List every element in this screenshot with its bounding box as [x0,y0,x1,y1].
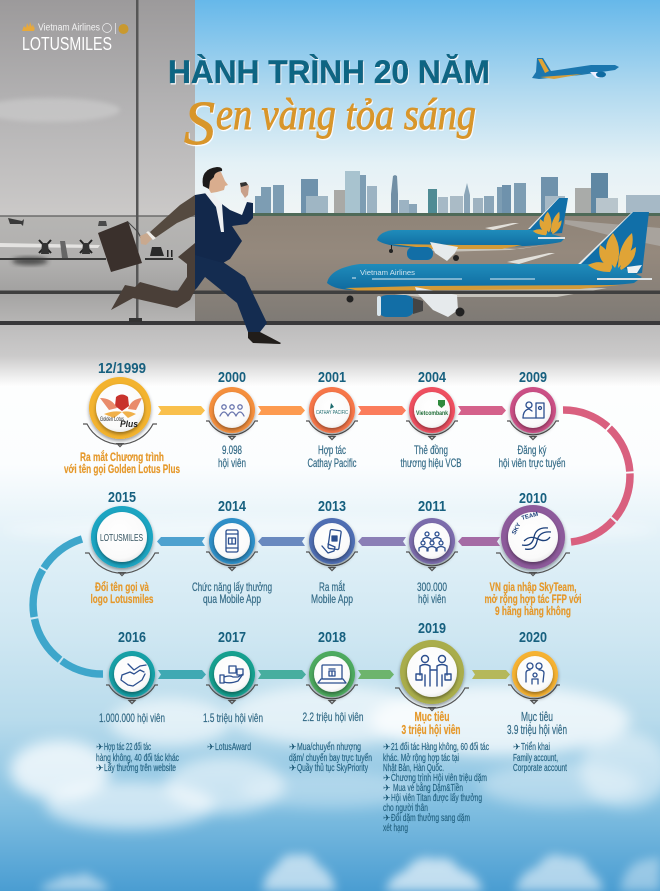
node: 2019: cho người thân [383,802,428,814]
node: 2019 [383,621,489,834]
node: 2019: Mục tiêu [414,710,450,724]
node: 2018: Mua/chuyển nhượng [297,741,361,753]
node: 2010 SkyTeam: 9 hãng hàng không [495,604,571,618]
node: 2010 SkyTeam: VN gia nhập SkyTeam, [490,580,576,594]
node: 2019: ✈ [383,794,391,804]
node: 2010 SkyTeam: SKY [511,522,523,536]
node: 2014: Chức năng lấy thưởng [192,580,272,594]
node: 12/1999 Golden Lotus Plus: Golden Lotus [100,417,124,423]
node: 2018: 2018 [318,630,346,646]
node: 2010 SkyTeam [484,491,582,618]
front leg [195,255,267,332]
timeline connector: pink curve 2009 to 2010 [563,410,630,542]
parked plane (rear) [377,198,568,261]
node: 2020: Corporate account [513,762,567,774]
node: 2014: qua Mobile App [203,592,261,606]
node: 2009 [498,370,566,470]
running businessman [98,167,281,344]
node: 2010 SkyTeam: mở rộng hợp tác FFP với [484,592,582,606]
node: 2017: 1.5 triệu hội viên [203,711,263,725]
node: 2017: LotusAward [215,741,251,753]
node: 2018: 2.2 triệu hội viên [302,710,364,724]
node: 2019: Nhật Bản, Hàn Quốc. [383,762,444,774]
row 1 arrows [158,406,506,415]
node: 2009: Đăng ký [518,443,546,457]
hero scene: airport window [0,0,660,322]
node: 2015 Lotusmiles: 2015 [108,490,136,506]
node: 2014 [192,499,272,606]
node: 2015 Lotusmiles: LOTUSMILES [100,533,143,544]
node: 2016: 1.000.000 hội viên [99,711,165,725]
node: 2001: CATHAY PACIFIC [316,410,348,416]
node: 2019: Mua vé bằng Dặm&Tiền [393,781,463,794]
node: 2013 [306,499,358,606]
node: 2020: 3.9 triệu hội viên [507,723,567,737]
row 3 arrows [158,670,510,679]
node: 2019: xét hạng [383,822,408,834]
node: 12/1999 Golden Lotus Plus: 12/1999 [98,361,146,377]
node: 12/1999 Golden Lotus Plus: với tên gọi Golden Lotus Plus [64,462,180,476]
node: 2019: khác. Mở rộng hợp tác tại [383,752,459,764]
node: 12/1999 Golden Lotus Plus: Plus [120,419,138,429]
node: 2019: ✈ [383,814,391,824]
grey panel [0,0,195,216]
logo: Vietnam Airlines Lotusmiles [22,22,128,54]
node: 2004: Thẻ đồng [414,443,448,457]
node: 2017: 2017 [218,630,246,646]
node: 2000: 9.098 [222,443,242,457]
node: 2004 [400,370,462,470]
node: 2020: ✈ [513,743,521,753]
node: 2019: ✈ [383,774,391,784]
node: 2019: Hội viên Titan được lấy thưởng [391,792,482,804]
node: 2016: Lấy thưởng trên website [104,762,176,774]
node: 2020 [507,630,567,774]
city skyline [255,171,660,216]
shirt [205,191,224,232]
subtitle: S [184,90,215,158]
node: 2019: ✈ [383,743,391,753]
node: 2016: 2016 [118,630,146,646]
node: 2011 [406,499,458,606]
logo: Vietnam Airlines Lotusmiles: LOTUSMILES [22,34,112,54]
parked plane (front) [327,212,652,317]
node: 2011: 2011 [418,499,446,515]
node: 2019: ✈ [383,784,391,794]
flying plane [532,58,619,79]
node: 2018: dặm/ chuyến bay trực tuyến [289,752,372,764]
node: 2013: 2013 [318,499,346,515]
node: 2015 Lotusmiles: logo Lotusmiles [90,592,154,606]
node: 2016: hàng không, 40 đối tác khác [96,752,179,764]
briefcase [98,221,142,272]
rear arm (sepia) [150,195,195,238]
node: 2019: Chương trình Hội viên triệu dặm [391,772,487,784]
node: 2016: ✈ [96,764,104,774]
node: 12/1999 Golden Lotus Plus [64,361,180,476]
head [206,170,228,193]
logo: Vietnam Airlines Lotusmiles: Vietnam Airlines [38,22,100,34]
node: 2019: 2019 [418,621,446,637]
node: 2018 [289,630,372,774]
node: 2017 [203,630,263,753]
node: 2016 [96,630,179,774]
torso [195,193,253,263]
node: 2018: Quầy thủ tục SkyPriority [297,762,368,774]
node: 2009: hội viên trực tuyến [498,456,566,470]
node: 2014: 2014 [218,499,246,515]
subtitle: en vàng tỏa sáng [216,90,476,139]
node: 2000 [206,370,258,470]
node: 2020: Triển khai [521,741,550,753]
subtitle [184,90,476,158]
tarmac [195,216,660,322]
node: 2013: Mobile App [311,592,353,606]
node: 2016: ✈ [96,743,104,753]
window frame [0,0,660,387]
page background with clouds [0,322,660,891]
node: 2010 SkyTeam: TEAM [521,512,539,522]
fist [240,182,249,198]
row 2 arrows [157,537,500,546]
node: 2020: Family account, [513,752,558,764]
node: 2018: ✈ [289,764,297,774]
node: 2001: 2001 [318,370,346,386]
node: 12/1999 Golden Lotus Plus: Ra mắt Chương trình [80,449,164,464]
node: 2019: 3 triệu hội viên [402,723,460,737]
node: 2004: 2004 [418,370,446,386]
node: 2015 Lotusmiles [85,490,159,606]
node: 2019: 21 đối tác Hàng không, 60 đối tác [391,741,489,753]
node: 2001 [306,370,358,470]
parked plane (front): Vietnam Airlines [360,268,415,277]
node: 2015 Lotusmiles: Đổi tên gọi và [95,580,149,594]
node: 2010 SkyTeam: 2010 [519,491,547,507]
node: 2013: Ra mắt [319,579,345,594]
rear leg and coat tail (sepia) [111,243,195,310]
sky [195,0,660,218]
node: 2019: Đổi dặm thưởng sang dặm [391,812,470,824]
node: 2018: ✈ [289,743,297,753]
node: 2001: Cathay Pacific [308,456,356,470]
node: 2000: 2000 [218,370,246,386]
title: HÀNH TRÌNH 20 NĂM [168,54,490,90]
node: 2009: 2009 [519,370,547,386]
node: 2011: hội viên [418,592,446,606]
node: 2020: 2020 [519,630,547,646]
node: 2004: Vietcombank [416,410,448,417]
node: 2000: hội viên [218,456,246,470]
node: 2011: 300.000 [417,580,447,594]
old propeller planes [0,218,173,265]
node: 2001: Hợp tác [318,443,346,457]
node: 2004: thương hiệu VCB [400,456,462,470]
timeline connector: blue curve 2015 to 2016 [33,539,103,674]
node: 2017: ✈ [207,743,215,753]
node: 2020: Mục tiêu [521,710,553,724]
node: 2016: Hợp tác 22 đối tác [104,741,151,753]
